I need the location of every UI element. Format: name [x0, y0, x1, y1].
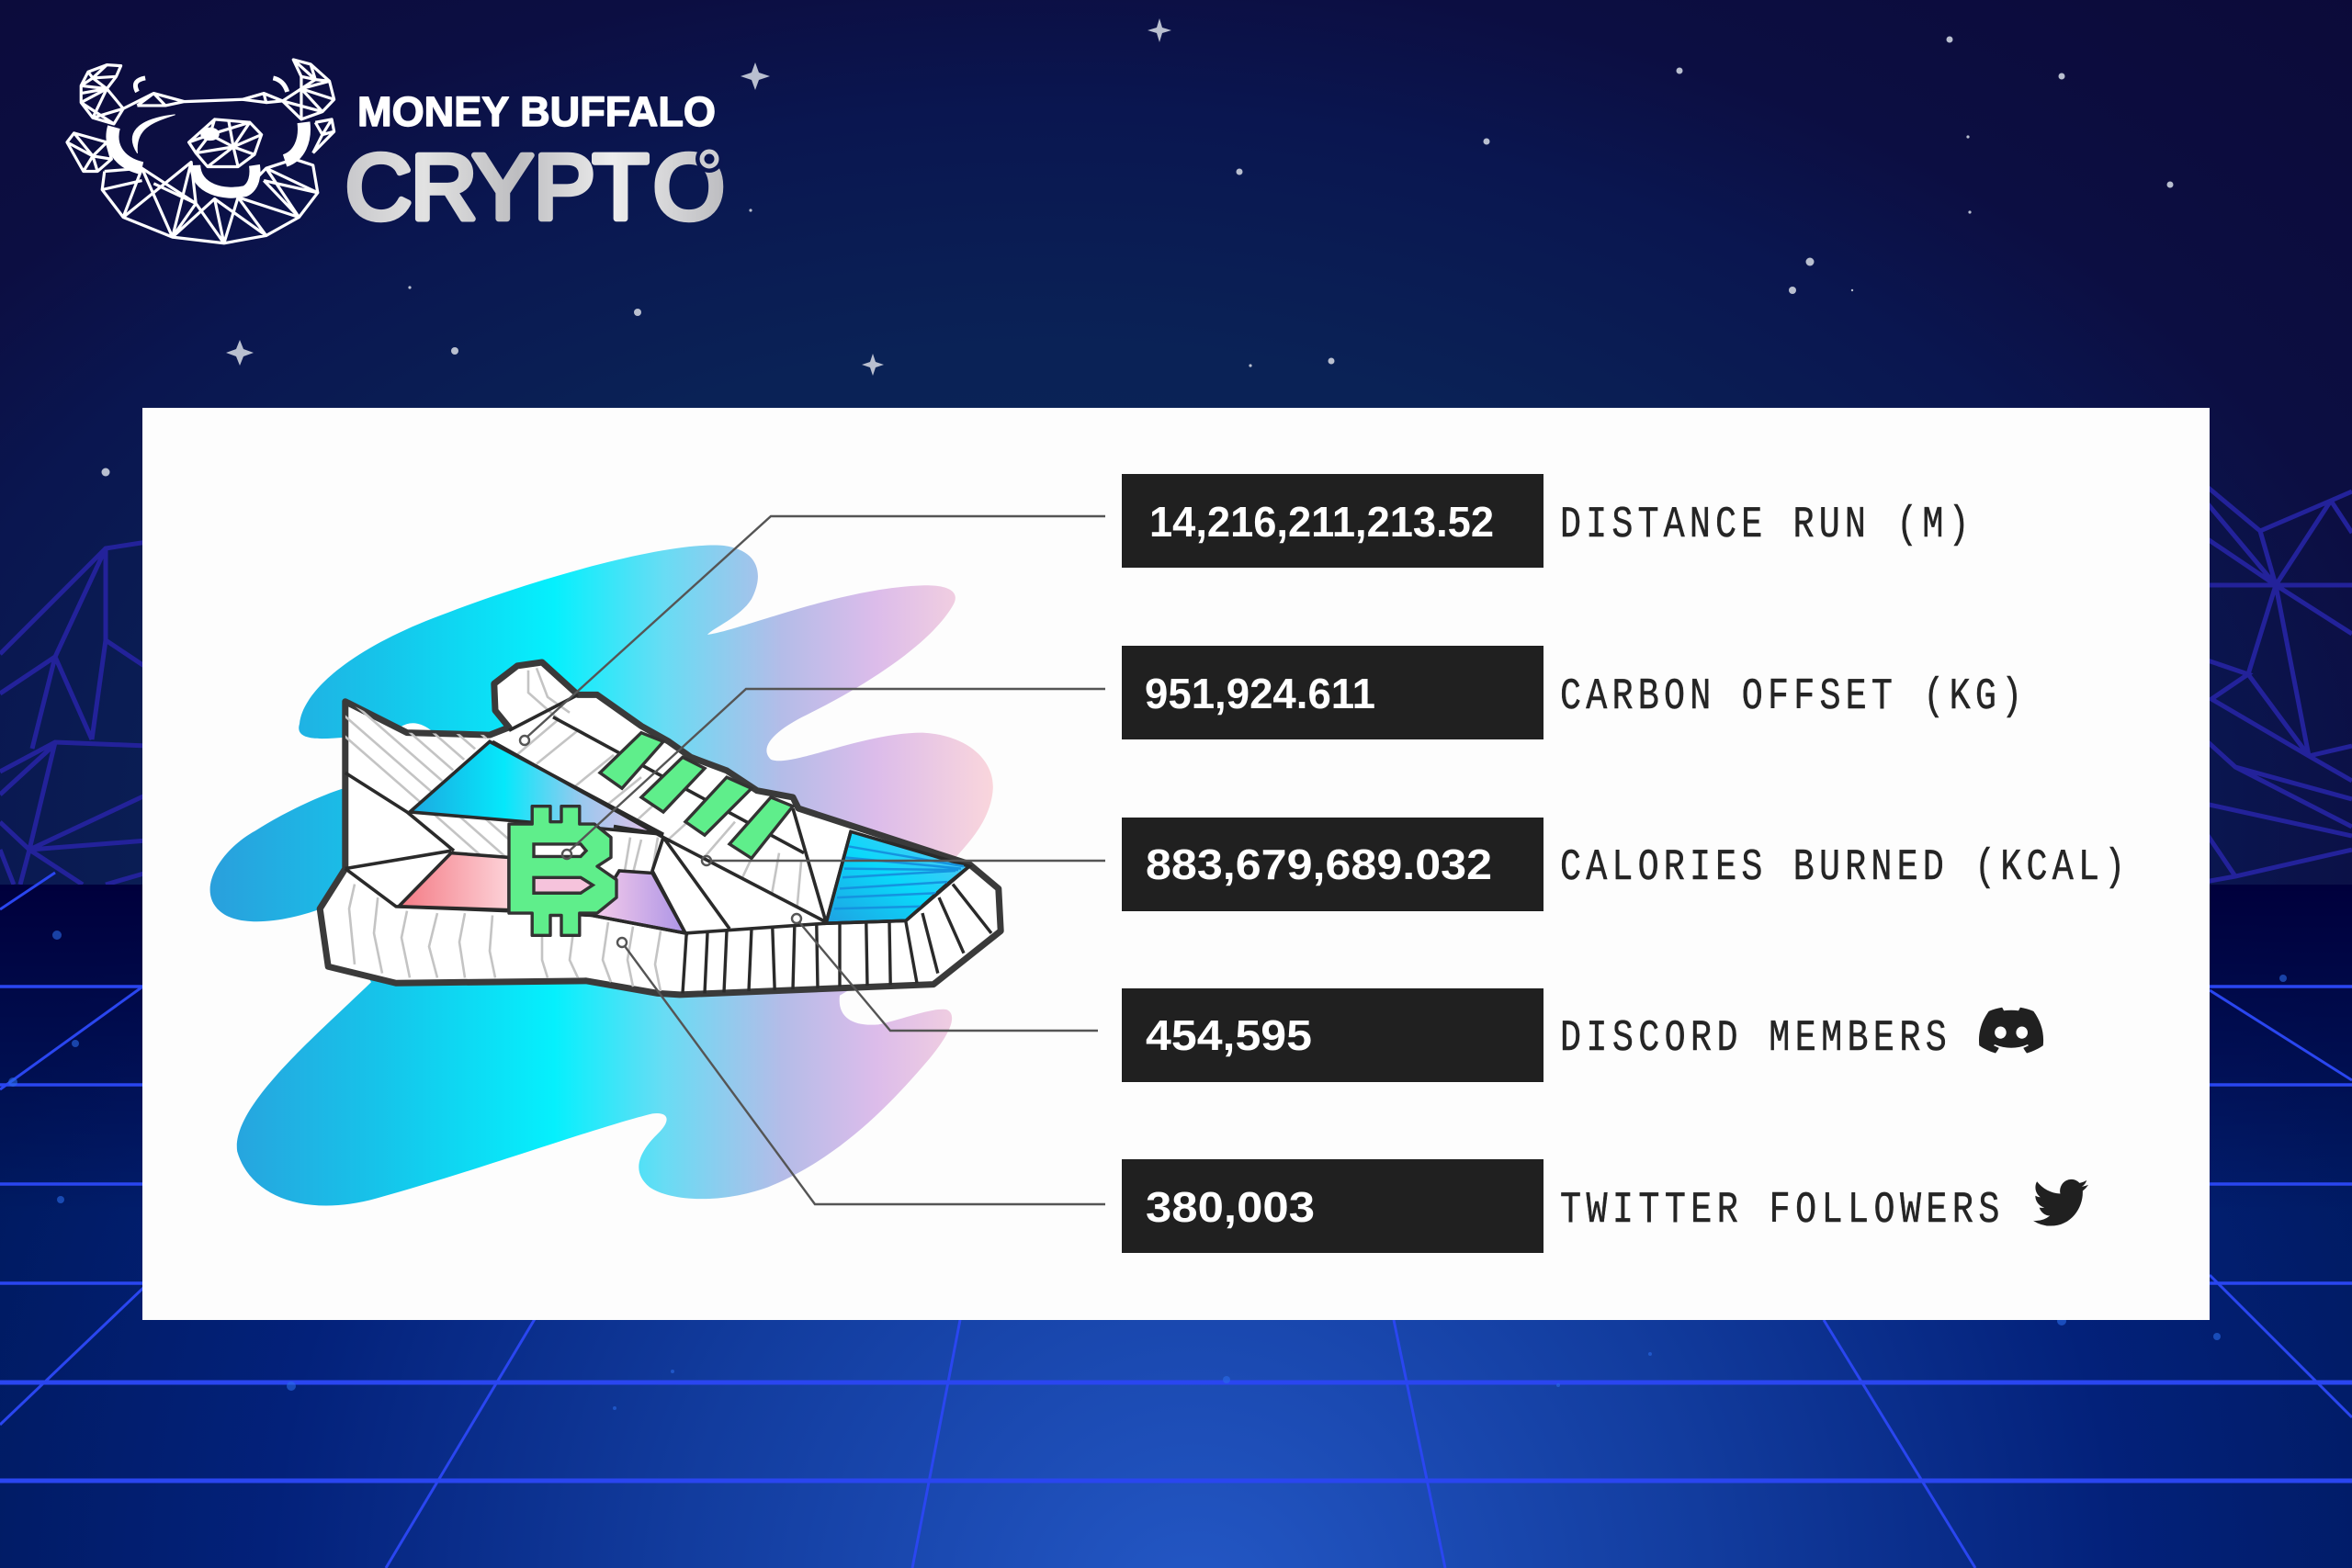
stat row: discord members: 454,595 [1146, 1011, 1312, 1059]
logo text: MONEY BUFFALO: MONEY BUFFALO [357, 88, 716, 135]
shoe gray hatch: under upper panel [412, 814, 514, 856]
shoe structural lines [345, 694, 969, 933]
stat row: discord members [1122, 988, 2043, 1082]
stat row: distance run [1122, 474, 1970, 568]
stat row: calories burned [1122, 818, 2125, 911]
stat row: carbon offset: CARBON OFFSET (KG) [1560, 672, 2022, 722]
logo icon: wireframe buffalo [67, 60, 334, 243]
logo [67, 60, 725, 243]
logo text detail: ring on the O [695, 145, 723, 173]
bitcoin symbol [509, 807, 616, 935]
background: left wireframe mountains [0, 542, 147, 885]
stat row: distance run: DISTANCE RUN (M) [1560, 501, 1970, 550]
callout lines [520, 516, 1105, 1204]
icon: twitter [2033, 1179, 2088, 1226]
shoe body [320, 662, 1001, 995]
gradient blob [210, 546, 993, 1206]
logo text: CRYPTO: CRYPTO [345, 136, 725, 239]
shoe upper colour panel [410, 741, 663, 834]
stat row: carbon offset [1122, 646, 2022, 739]
floor sparkles [8, 931, 2287, 1410]
shoelaces [600, 733, 793, 858]
background: right wireframe mountains [2205, 485, 2352, 882]
stat row: calories burned: 883,679,689.032 [1146, 840, 1492, 888]
floor grid lines [0, 873, 2352, 1568]
heel stripes [834, 846, 964, 908]
shoe red panel [399, 853, 509, 910]
background: floor [0, 873, 2352, 1568]
stat row: discord members: DISCORD MEMBERS [1560, 1014, 1947, 1064]
stat row: calories burned: CALORIES BURNED (KCAL) [1560, 843, 2125, 893]
shoe gray hatch: heel [345, 706, 487, 802]
stat row: distance run: 14,216,211,213.52 [1149, 498, 1494, 546]
white notch at collar [400, 723, 433, 732]
shoe purple panel [592, 871, 685, 933]
shoe gray hatch: tongue and sole [349, 668, 661, 991]
shoe sole ribs [683, 885, 991, 993]
icon: discord [1979, 1008, 2043, 1054]
panel: white stats card [142, 408, 2210, 1320]
shoe heel colour panel [826, 831, 969, 923]
shoe illustration [210, 546, 1001, 1206]
shoe gray hatch: midfoot [516, 720, 803, 906]
stat row: twitter followers: TWITTER FOLLOWERS [1560, 1186, 1999, 1235]
stat row: twitter followers [1122, 1159, 2088, 1253]
stat row: carbon offset: 951,924.611 [1145, 670, 1375, 717]
stat row: twitter followers: 380,003 [1146, 1183, 1315, 1231]
background: night sky [0, 0, 2352, 886]
background: stars [101, 18, 2174, 476]
